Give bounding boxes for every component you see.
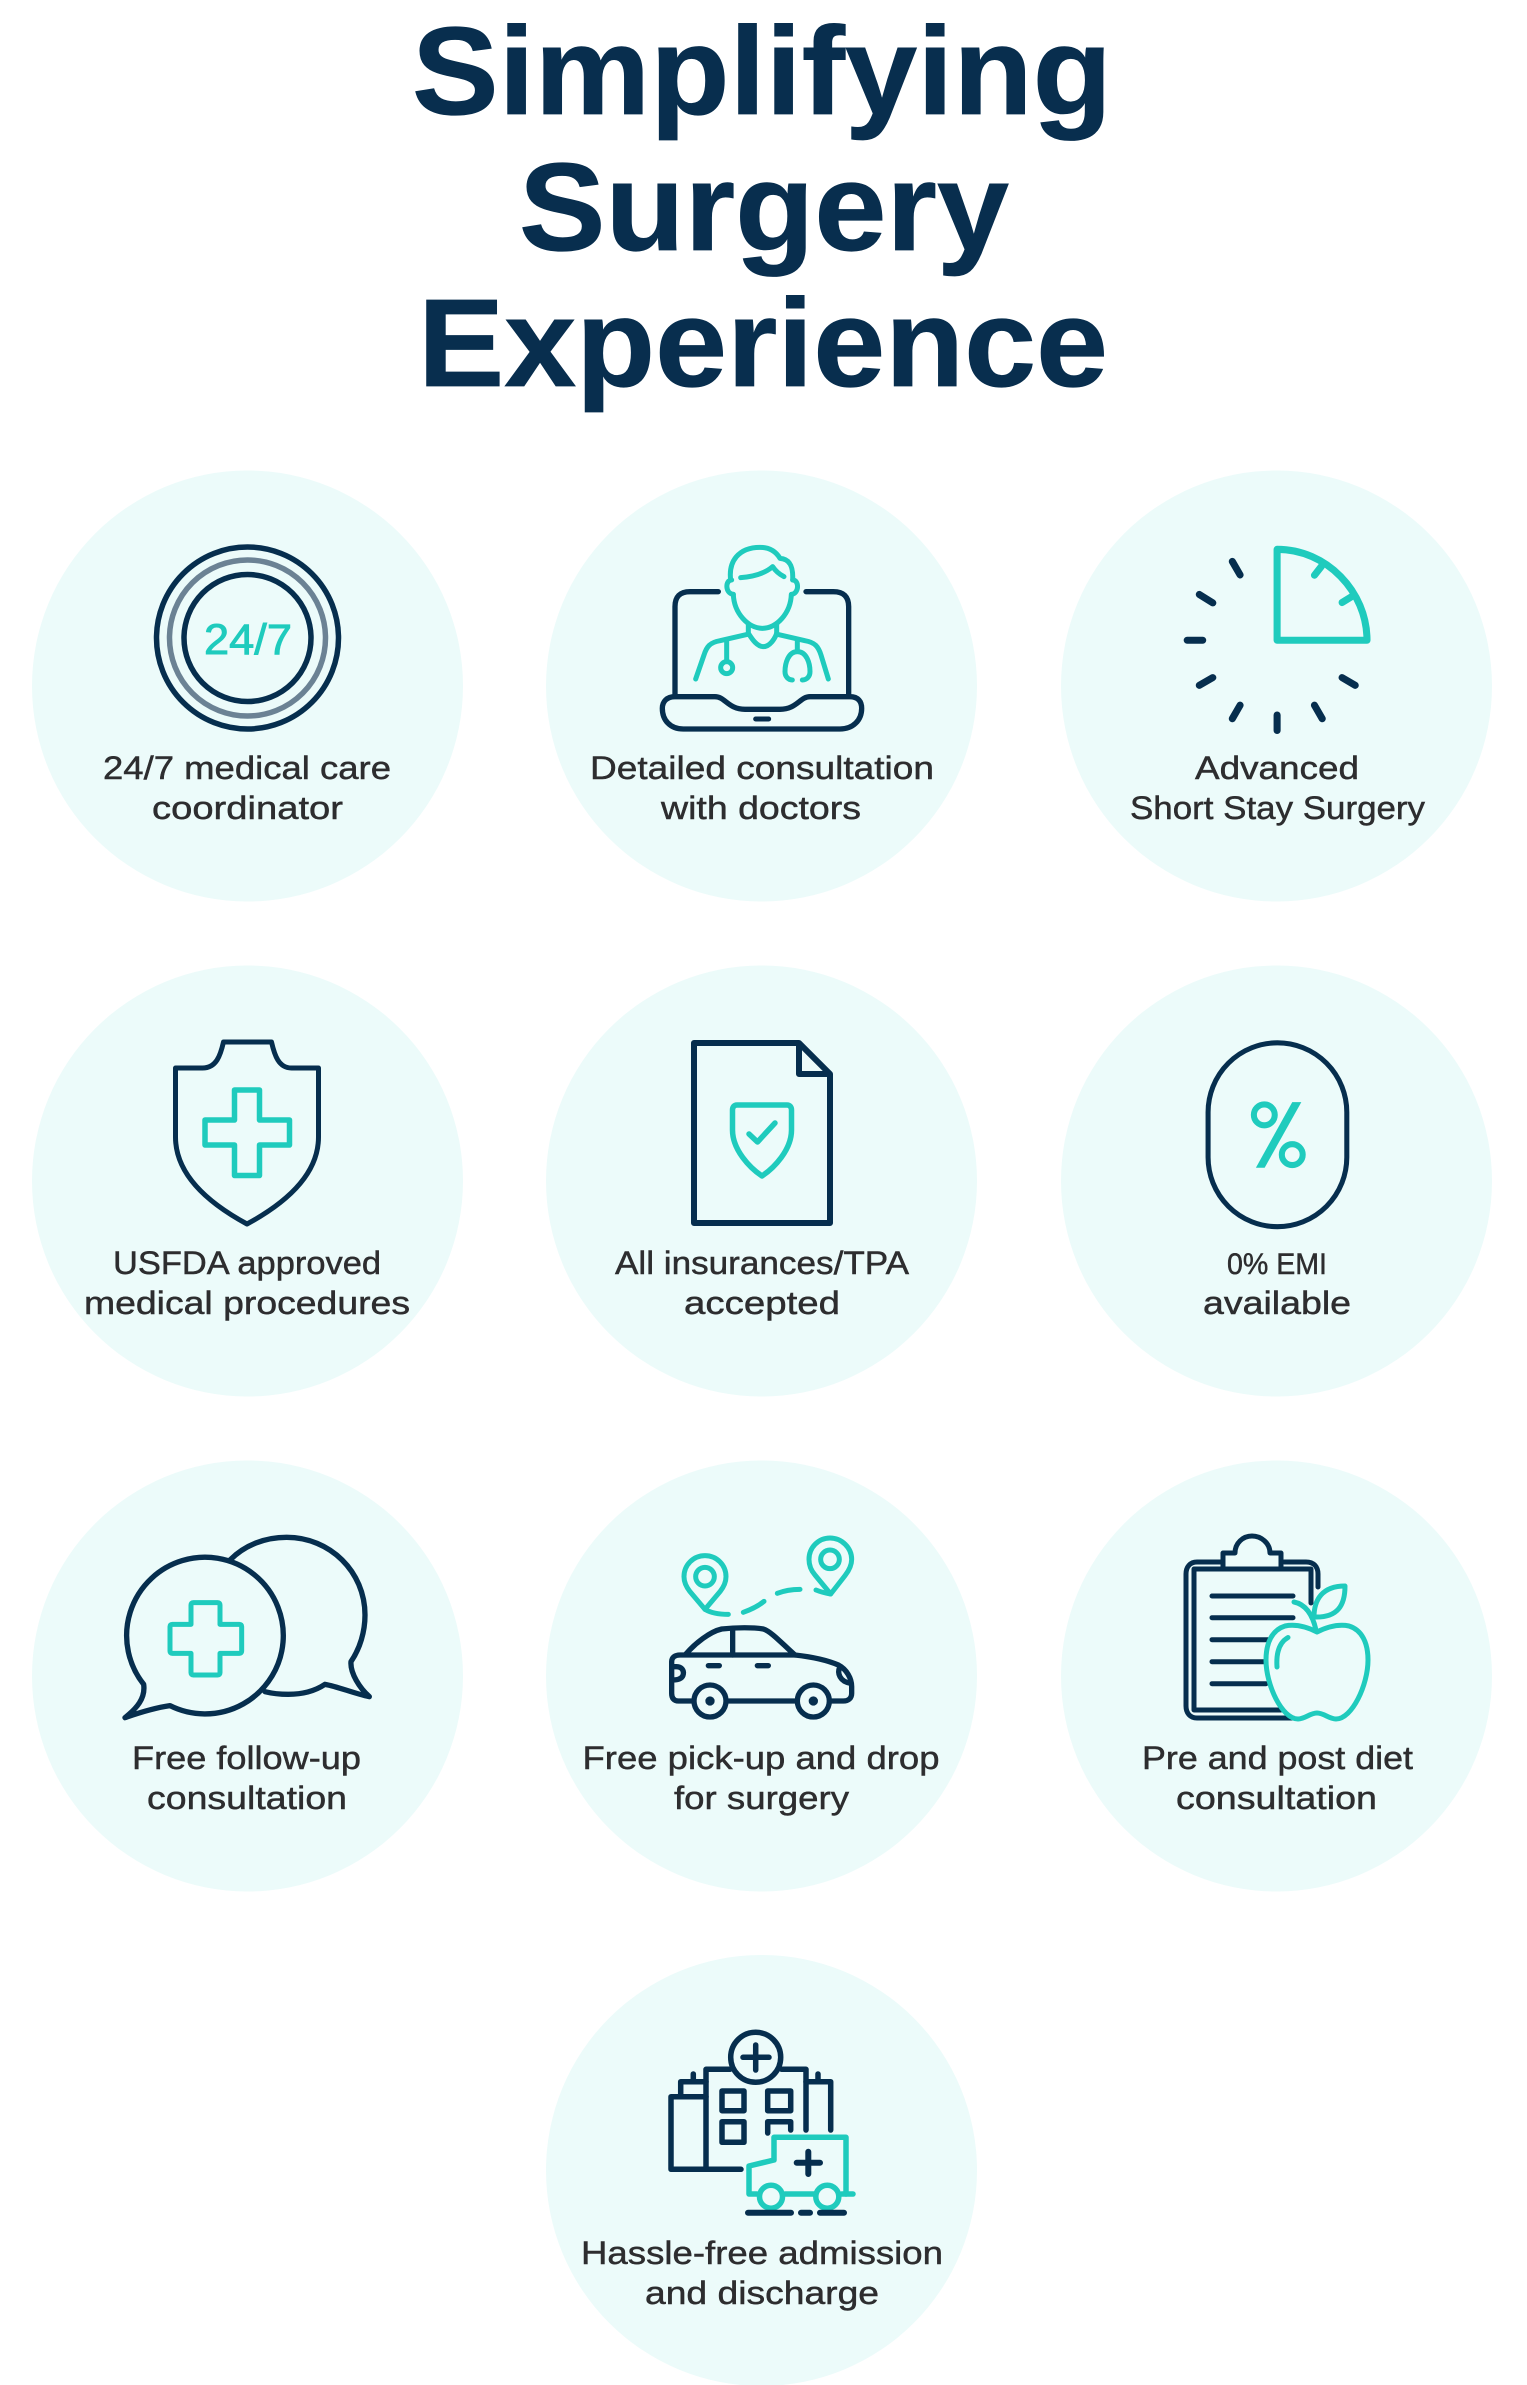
title: Surgery bbox=[519, 138, 1009, 277]
icon: car with route pins bbox=[672, 1538, 852, 1717]
panel: USFDA approved medical procedures bbox=[32, 966, 463, 1396]
icon: quarter clock bbox=[1187, 549, 1367, 730]
label: and discharge bbox=[645, 2275, 879, 2311]
label bbox=[581, 2235, 943, 2311]
label: medical procedures bbox=[84, 1285, 410, 1321]
icon: percent in pill bbox=[1208, 1043, 1347, 1227]
label bbox=[590, 750, 934, 826]
icon: document with shield bbox=[694, 1043, 830, 1223]
icon: doctor on laptop bbox=[662, 547, 862, 729]
label bbox=[132, 1740, 361, 1816]
label: coordinator bbox=[152, 790, 343, 826]
label: consultation bbox=[147, 1780, 347, 1816]
icon: shield with cross bbox=[176, 1042, 318, 1224]
label: 24/7 medical care bbox=[103, 750, 391, 786]
label: Detailed consultation bbox=[590, 750, 934, 786]
icon: clipboard and apple bbox=[1186, 1536, 1368, 1719]
label bbox=[84, 1245, 410, 1321]
label: for surgery bbox=[674, 1780, 849, 1816]
label bbox=[1203, 1248, 1351, 1321]
panel: free pick-up and drop for surgery bbox=[546, 1460, 977, 1892]
label: Free follow-up bbox=[132, 1740, 361, 1776]
label: available bbox=[1203, 1285, 1351, 1321]
icon: chat bubbles with cross bbox=[125, 1537, 369, 1718]
label: with doctors bbox=[660, 790, 861, 826]
label bbox=[1142, 1740, 1413, 1816]
label: Hassle-free admission bbox=[581, 2235, 943, 2271]
label: Advanced bbox=[1195, 750, 1359, 786]
label bbox=[103, 750, 391, 826]
label: accepted bbox=[684, 1285, 840, 1321]
label: Short Stay Surgery bbox=[1130, 790, 1425, 826]
title bbox=[412, 2, 1112, 413]
panel: hassle-free admission and discharge bbox=[546, 1955, 977, 2385]
panel: 0% EMI available bbox=[1061, 966, 1492, 1396]
icon: 24/7 concentric rings bbox=[156, 547, 338, 729]
label: consultation bbox=[1176, 1780, 1377, 1816]
label: Pre and post diet bbox=[1142, 1740, 1413, 1776]
panel: all insurances/TPA accepted bbox=[546, 966, 977, 1396]
panel: advanced short stay surgery bbox=[1061, 470, 1492, 902]
panel: 24/7 medical care coordinator bbox=[32, 470, 463, 902]
icon: 24/7 concentric rings: 24/7 bbox=[204, 616, 292, 664]
panel: free follow-up consultation bbox=[32, 1460, 463, 1892]
label: USFDA approved bbox=[113, 1245, 381, 1281]
label bbox=[615, 1245, 910, 1321]
panel: pre and post diet consultation bbox=[1061, 1460, 1492, 1892]
label: 0% EMI bbox=[1227, 1248, 1327, 1281]
title: Simplifying bbox=[412, 2, 1112, 141]
label: Free pick-up and drop bbox=[582, 1740, 940, 1776]
label bbox=[582, 1740, 940, 1816]
label bbox=[1130, 750, 1425, 826]
panel: detailed consultation with doctors bbox=[546, 470, 977, 902]
title: Experience bbox=[418, 274, 1108, 413]
icon: hospital and ambulance bbox=[671, 2032, 853, 2213]
label: All insurances/TPA bbox=[615, 1245, 910, 1281]
